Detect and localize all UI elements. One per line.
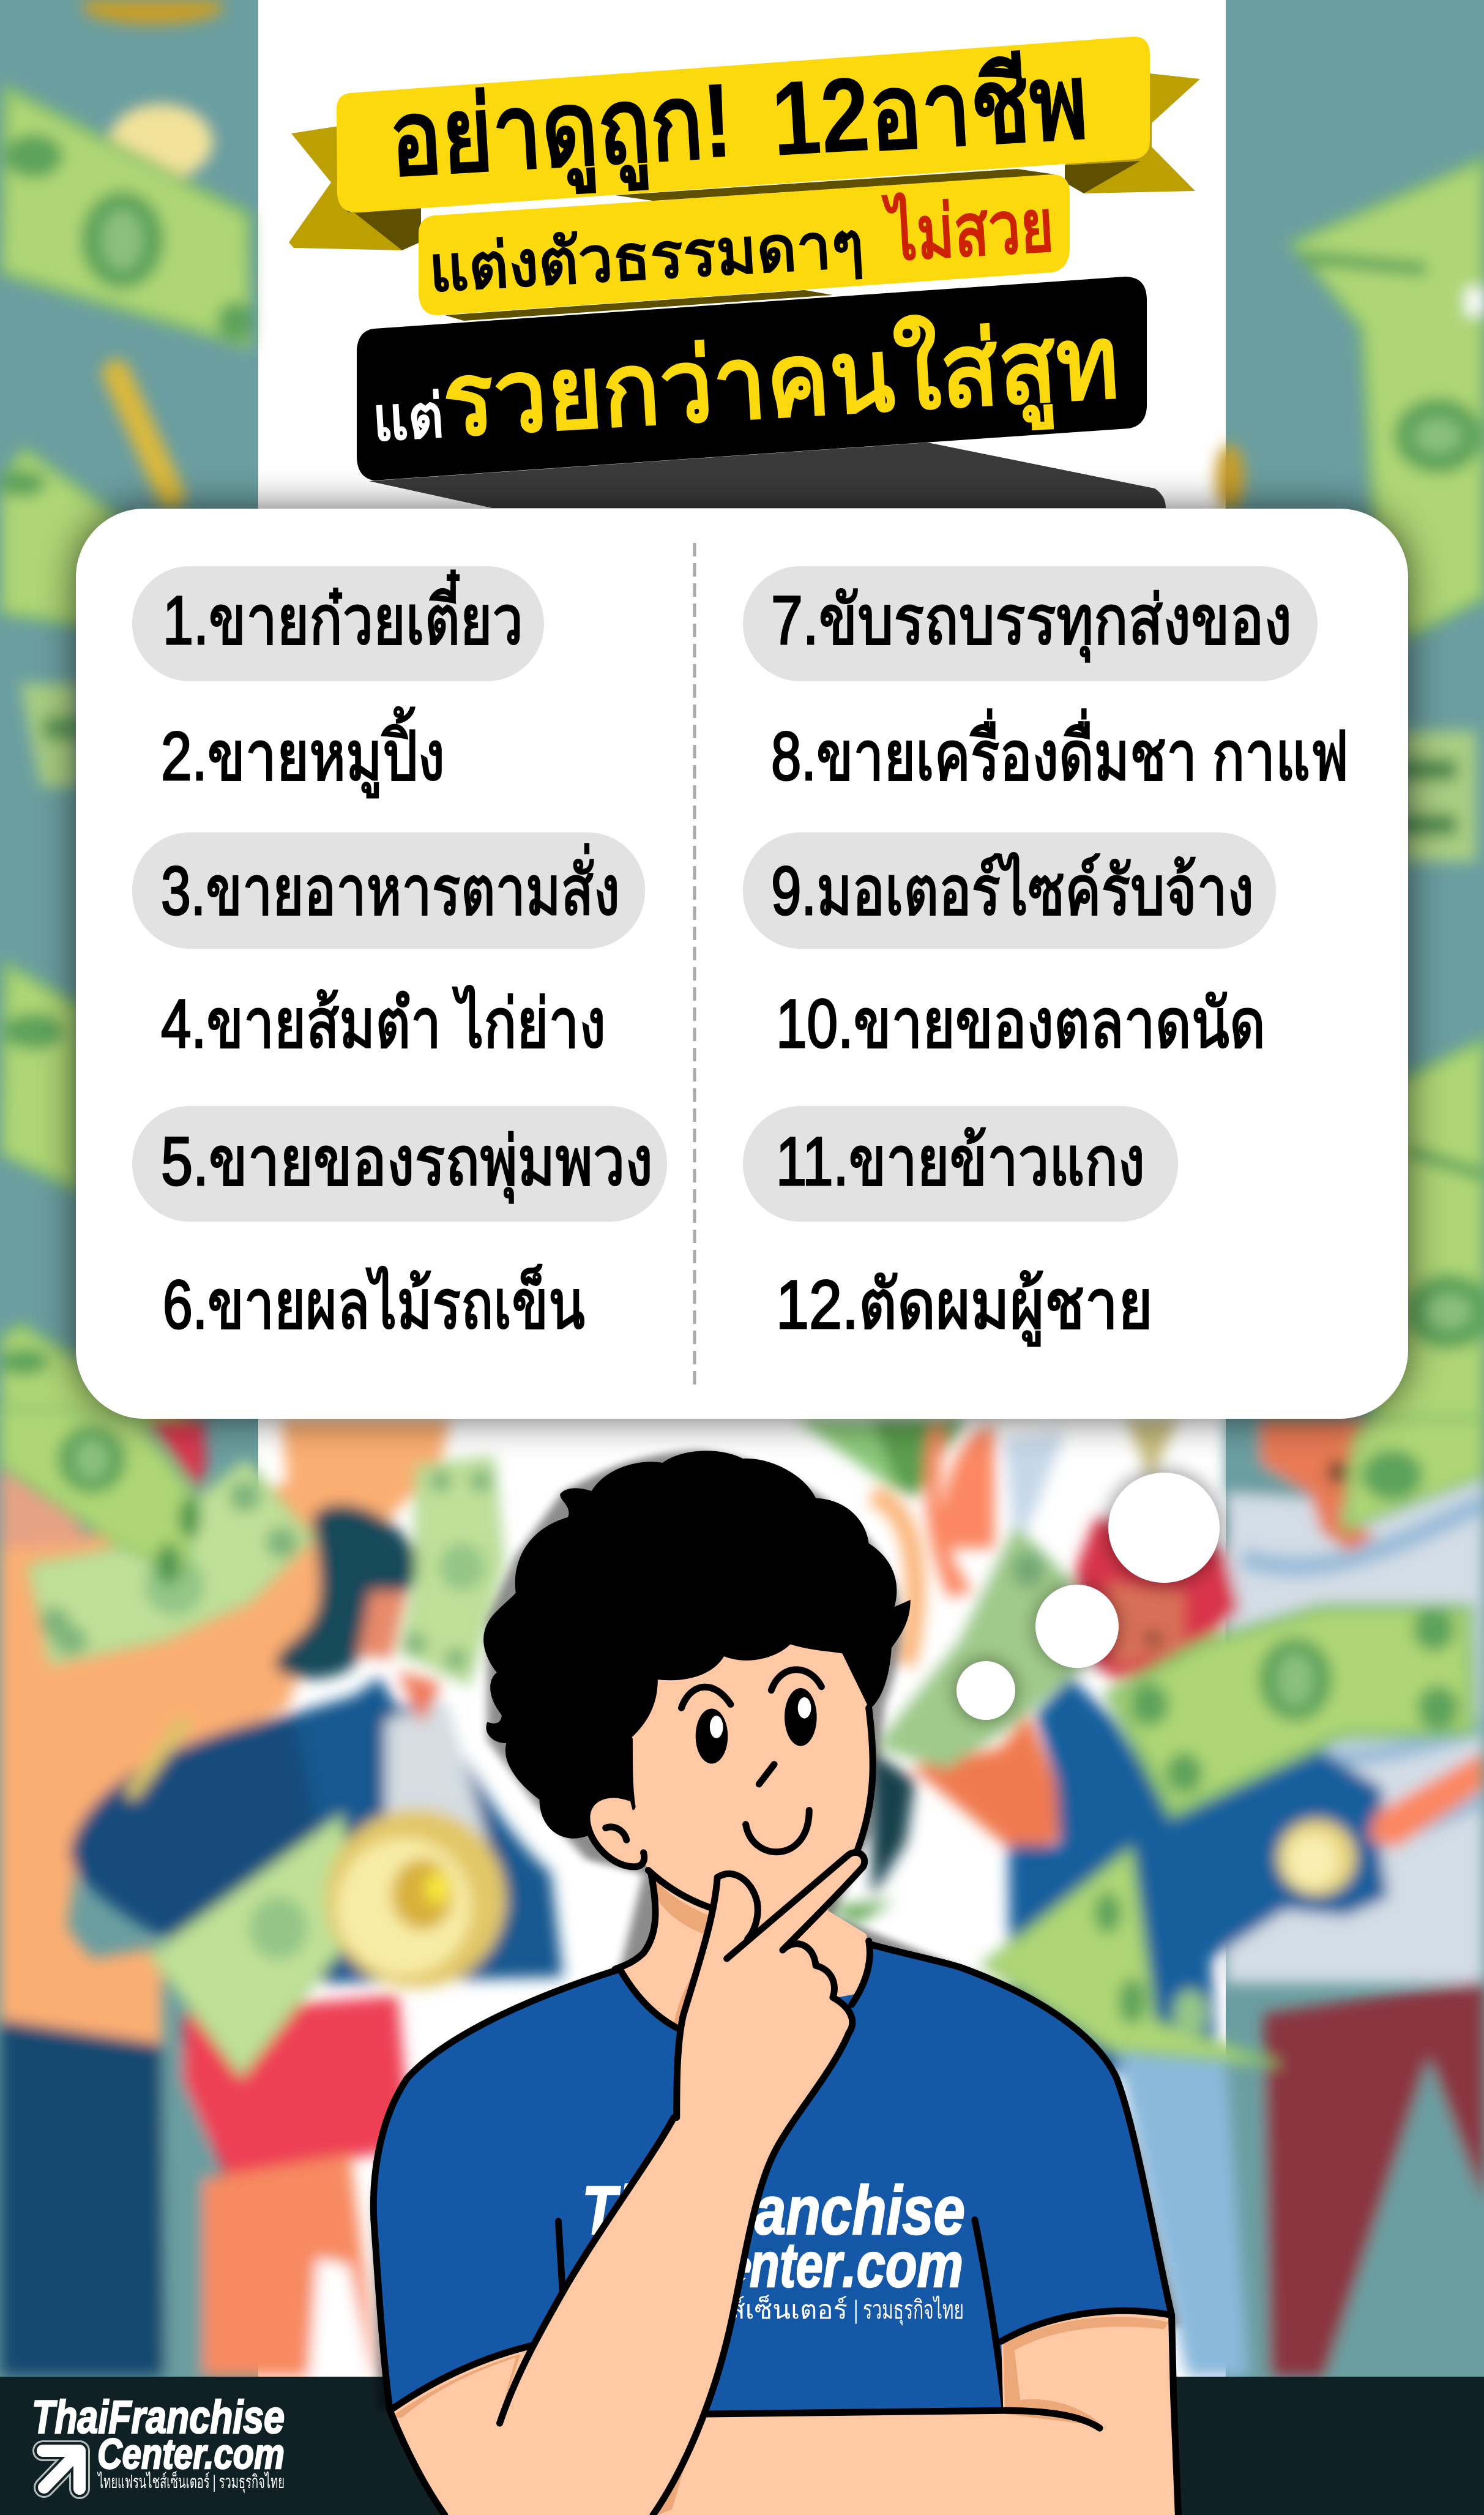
item 10: 10.ขายของตลาดนัด: [776, 985, 1266, 1062]
right-middle person: hair and face: [1075, 1518, 1239, 1680]
band 1 yellow: [337, 37, 1150, 212]
headline line 1 number and word: 12อาชีพ: [769, 43, 1091, 178]
band 3 black: [357, 277, 1147, 480]
middle dark behind head: [872, 1751, 915, 1897]
thought bubbles: [954, 1469, 1223, 1722]
item 7: [743, 566, 1318, 681]
headline line 2: แต่งตัวธรรมดาๆ: [427, 209, 866, 305]
footer bar: [0, 2377, 1484, 2515]
orange forearm: [911, 1714, 1059, 1852]
band 2 yellow: [419, 174, 1070, 315]
soft halo behind character: [374, 1450, 1178, 2410]
headline line 2 red: ไม่สวย: [881, 184, 1056, 276]
forearm and hand: [390, 1852, 865, 2515]
right column: stripes person: [1226, 1419, 1484, 1983]
lower note, green: [984, 1849, 1279, 2065]
shirt logo: ไทยแฟรนไชส์เซ็นเตอร์: [580, 2295, 848, 2324]
shirt logo: | รวมธุรกิจไทย: [854, 2295, 964, 2326]
item 11: [743, 1106, 1178, 1222]
item 8: 8.ขายเครื่องดื่มชา กาแฟ: [771, 709, 1349, 794]
hair: [483, 1451, 911, 1839]
right-middle person: blue shirt: [1009, 1677, 1388, 2081]
footer logo: [32, 2391, 285, 2494]
item 5: 5.ขายของรถพุ่มพวง: [161, 1123, 653, 1203]
face: [629, 1644, 873, 1922]
note, upper right: [1344, 1419, 1484, 1530]
ribbon tails: [289, 72, 1200, 250]
footer logo: Center.com: [97, 2430, 285, 2478]
item 11: 11.ขายข้าวแกง: [776, 1123, 1145, 1200]
eyes: [696, 1688, 817, 1763]
item 1: [132, 566, 544, 681]
neck: [620, 1867, 869, 2028]
icon: arrow: [43, 2451, 80, 2489]
nose: [759, 1765, 774, 1784]
ear: [587, 1795, 644, 1867]
footer logo: ไทยแฟรนไชส์เซ็นเตอร์ | รวมธุรกิจไทย: [97, 2470, 285, 2494]
item 12: 12.ตัดผมผู้ชาย: [776, 1266, 1153, 1346]
left person: jacket: [70, 1677, 563, 1983]
headline line 3 white: แต่: [371, 381, 446, 454]
money notes, right: [880, 1530, 1079, 1767]
item 4: 4.ขายส้มตำ ไก่ย่าง: [161, 985, 606, 1062]
item 6: 6.ขายผลไม้รถเข็น: [163, 1265, 585, 1343]
item 1: 1.ขายก๋วยเตี๋ยว: [163, 570, 523, 659]
shirt logo: [580, 2172, 965, 2326]
item 9: [743, 832, 1276, 949]
left person: navy trousers: [0, 2020, 165, 2377]
item 3: [132, 832, 645, 949]
big gold coin: [326, 1809, 506, 1988]
panel shadow: [76, 509, 1408, 1419]
headline line 3 yellow: รวยกว่าคนใส่สูท: [439, 303, 1122, 465]
lower right: light blue trousers: [1117, 2053, 1267, 2377]
middle: top-centre green note and ring: [872, 1419, 966, 1498]
band shadows: [369, 169, 1166, 508]
item 5: [132, 1106, 667, 1222]
money notes, left: [29, 1461, 312, 1664]
shirt logo: .com: [842, 2230, 963, 2301]
left person: hair: [275, 1504, 417, 1679]
item 7: 7.ขับรถบรรทุกส่งของ: [771, 582, 1292, 662]
bubble medium: [1035, 1585, 1119, 1668]
item 3: 3.ขายอาหารตามสั่ง: [161, 843, 620, 929]
eyebrows: [681, 1670, 821, 1708]
title ribbon: [289, 37, 1200, 508]
shirt logo: ThaiFranchise: [582, 2172, 965, 2249]
bubble small: [956, 1661, 1015, 1720]
orange arm, right: [1368, 1751, 1484, 1848]
small gold coin, right: [1278, 1820, 1356, 1896]
lower right: maroon trousers: [1264, 1980, 1484, 2377]
shirt logo: nter: [750, 2230, 845, 2301]
left person: orange top: [0, 1419, 450, 2044]
left person: red skirt and legs: [184, 1995, 411, 2179]
footer logo: ThaiFranchise: [32, 2391, 285, 2443]
shirt logo: Ce: [582, 2230, 753, 2301]
item 2: 2.ขายหมูปิ้ง: [161, 707, 445, 798]
headline line 1: อย่าดูถูก!: [386, 61, 736, 205]
t-shirt: [373, 1945, 1172, 2509]
bubble large: [1108, 1473, 1220, 1583]
item 9: 9.มอเตอร์ไซค์รับจ้าง: [771, 853, 1254, 929]
shirt side seams: [558, 2220, 1005, 2410]
character: thinking man in blue shirt: [373, 1450, 1178, 2515]
smile: [746, 1811, 809, 1852]
panel: 12 occupations list: [76, 509, 1408, 1419]
folded arm, right: [653, 2311, 1178, 2515]
